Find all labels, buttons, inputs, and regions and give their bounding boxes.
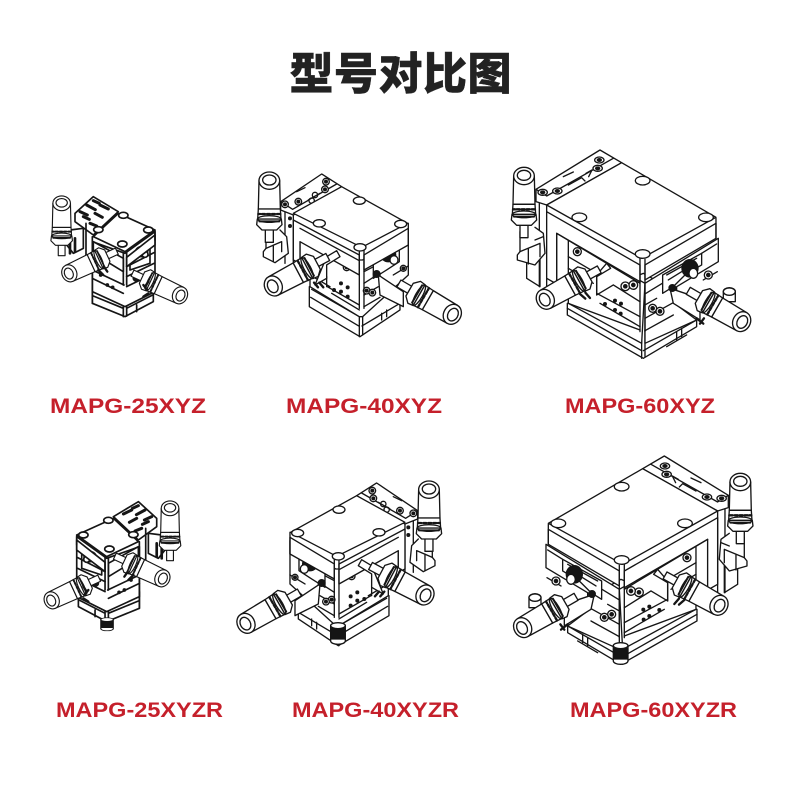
product drawing: MAPG-60XYZR stage xyxy=(509,456,753,664)
product label: MAPG-60XYZ: MAPG-60XYZ xyxy=(565,394,715,418)
title: 型号对比图 xyxy=(290,50,512,99)
product label: MAPG-25XYZR: MAPG-25XYZR xyxy=(56,698,224,722)
product drawing: MAPG-40XYZR stage xyxy=(232,481,442,646)
product drawing: MAPG-25XYZR stage xyxy=(40,501,181,631)
product drawing: MAPG-60XYZ stage xyxy=(511,150,755,358)
product drawing: MAPG-25XYZ stage xyxy=(51,196,191,317)
product label: MAPG-60XYZR: MAPG-60XYZR xyxy=(570,698,738,722)
product label: MAPG-25XYZ: MAPG-25XYZ xyxy=(50,394,206,418)
product label: MAPG-40XYZ: MAPG-40XYZ xyxy=(286,394,442,418)
product label: MAPG-40XYZR: MAPG-40XYZR xyxy=(292,698,460,722)
product drawing: MAPG-40XYZ stage xyxy=(257,172,466,337)
